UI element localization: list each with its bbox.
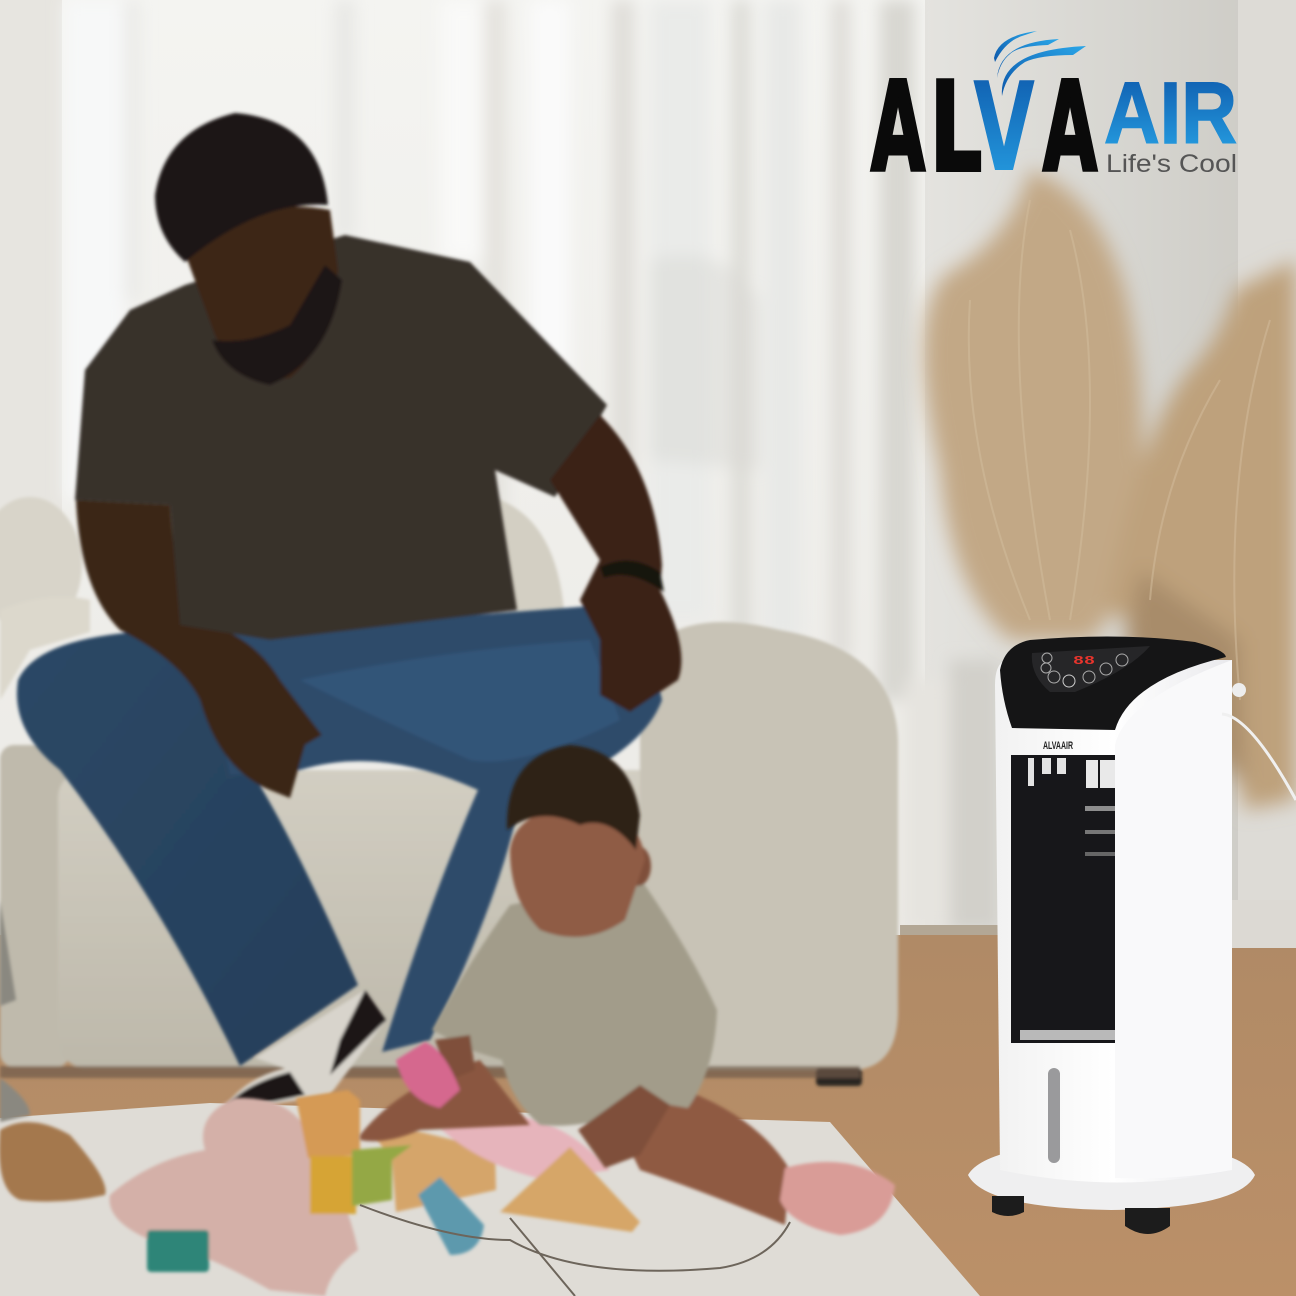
baby: right leg bbox=[620, 1092, 790, 1225]
man: t-shirt bbox=[75, 235, 607, 640]
baby: pink sock bbox=[780, 1162, 895, 1235]
cooler: power cord bbox=[1222, 714, 1296, 800]
toy: teal block bbox=[147, 1230, 209, 1272]
rug bbox=[0, 1103, 980, 1296]
logo: AIR wordmark: AIR bbox=[1104, 65, 1237, 162]
logo: ALVA wordmark: A bbox=[1043, 57, 1097, 200]
sofa bbox=[0, 497, 898, 1086]
toy: orange block bbox=[296, 1090, 360, 1158]
man: shoes and socks bbox=[222, 990, 386, 1112]
baby: face bbox=[510, 805, 645, 937]
toy: wooden triangle bbox=[500, 1147, 640, 1232]
logo: blue wing icon bbox=[994, 31, 1086, 96]
toy: striped cylinder bbox=[418, 1177, 484, 1255]
pampas strands bbox=[969, 200, 1270, 700]
man: watch bbox=[600, 561, 664, 592]
cooler: base bbox=[968, 1140, 1255, 1210]
logo: ALVA wordmark bbox=[871, 57, 1097, 200]
logo: tagline: Life's Cool bbox=[1106, 150, 1237, 178]
cooler: red display: 88 bbox=[1073, 654, 1095, 668]
cooler: water level window bbox=[1048, 1068, 1060, 1163]
toy: brown plush dog bbox=[0, 1122, 106, 1202]
cooler: black grille bbox=[1011, 755, 1115, 1043]
man: shoe shadow bbox=[222, 990, 386, 1112]
cooler: small brand label: ALVAAIR bbox=[1043, 740, 1073, 752]
man: left arm bbox=[76, 500, 322, 798]
cooler: side knob bbox=[1232, 683, 1246, 697]
logo: Alva Air bbox=[871, 31, 1237, 200]
pampas grass decoration bbox=[924, 170, 1296, 810]
toy: yellow block bbox=[310, 1156, 356, 1214]
logo: ALVA wordmark: V bbox=[973, 57, 1035, 200]
toy blocks and plush bbox=[0, 1090, 640, 1296]
toy: pink plush bear bbox=[110, 1098, 358, 1296]
man: beard bbox=[212, 265, 342, 385]
baby: pink cup bbox=[396, 1042, 460, 1108]
toy: pink rabbit bbox=[440, 1115, 610, 1180]
cooler: black top bbox=[1000, 636, 1226, 730]
baby bbox=[360, 745, 895, 1235]
man: hair bbox=[155, 113, 328, 262]
baby: hair bbox=[507, 745, 640, 850]
man: right arm bbox=[550, 415, 681, 712]
cooler: white body bbox=[995, 660, 1232, 1182]
toy: long wooden block bbox=[370, 1127, 496, 1212]
baby: ear bbox=[625, 846, 651, 886]
man sitting on sofa bbox=[17, 113, 681, 1112]
toy: green block bbox=[352, 1145, 412, 1206]
person at left edge bbox=[0, 900, 30, 1122]
air cooler product bbox=[968, 636, 1296, 1234]
floor bbox=[0, 900, 1296, 1296]
cooler: control panel bbox=[1032, 646, 1150, 692]
baby: bodysuit bbox=[432, 878, 717, 1126]
man: left leg bbox=[17, 630, 358, 1066]
cooler: wheels bbox=[992, 1196, 1170, 1234]
logo: ALVA wordmark: A bbox=[871, 57, 925, 200]
cooler: curved front panel bbox=[1115, 660, 1232, 1178]
man: neck and face bbox=[182, 207, 338, 379]
rug cord bbox=[360, 1205, 790, 1296]
baby: hand on cup bbox=[435, 1035, 475, 1080]
baby: left leg bbox=[360, 1060, 530, 1141]
logo: ALVA wordmark: L bbox=[930, 57, 982, 200]
baby: hand on toy bbox=[578, 1085, 670, 1168]
man: right leg bbox=[200, 606, 662, 1052]
man: denim highlight bbox=[300, 640, 620, 762]
